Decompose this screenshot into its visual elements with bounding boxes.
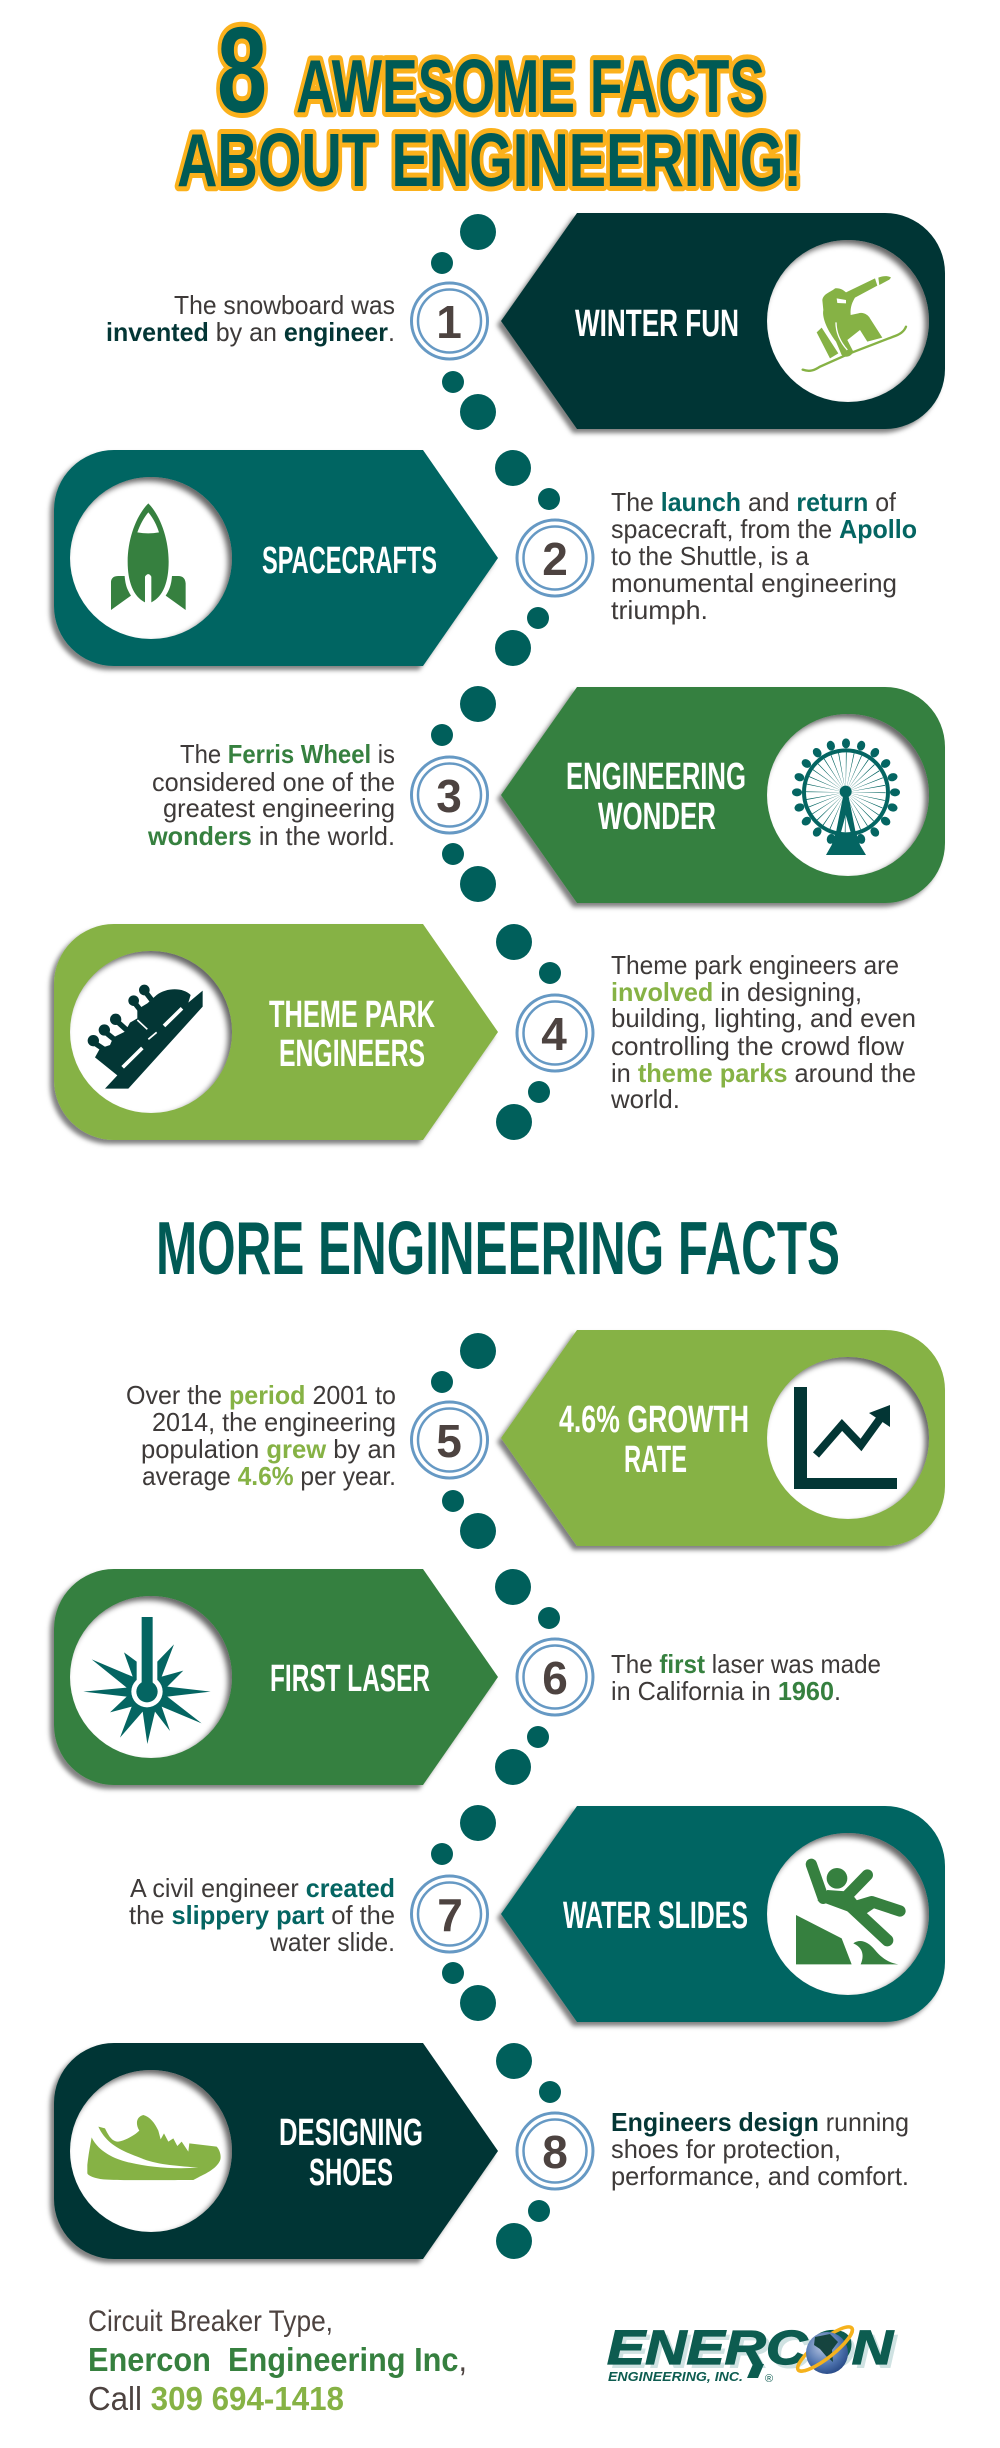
banner label: THEME PARK	[269, 994, 435, 1036]
fact text: The launch and return of	[611, 487, 897, 517]
banner shape	[501, 1806, 945, 2022]
number badge: 6	[542, 1652, 568, 1704]
banner label: SPACECRAFTS	[262, 540, 437, 582]
icon: growth chart	[794, 1387, 897, 1489]
fact text	[610, 950, 916, 1114]
banner label: RATE	[624, 1439, 687, 1481]
panel: fact 7 water slides	[129, 1805, 945, 2022]
fact text: triumph.	[611, 595, 708, 625]
number badge: 4	[541, 1008, 567, 1060]
fact text	[147, 739, 395, 851]
fact text: 2014, the engineering	[152, 1407, 396, 1437]
banner shape	[54, 924, 498, 1140]
fact text	[611, 1649, 881, 1706]
footer contact text: Enercon Engineering Inc,	[88, 2341, 467, 2378]
number badge	[517, 1639, 593, 1715]
connector dots	[431, 214, 496, 430]
panel: fact 8 designing shoes	[54, 2043, 909, 2259]
banner label	[566, 756, 746, 838]
banner label	[269, 994, 435, 1075]
connector dots	[495, 1569, 560, 1785]
number badge: 3	[436, 770, 462, 822]
banner label: ENGINEERING	[566, 756, 746, 798]
icon: running shoe	[87, 2115, 221, 2180]
panel: fact 3 engineering wonder	[147, 686, 945, 903]
fact text: invented by an engineer.	[106, 317, 395, 347]
logo: Enercon Engineering: ENGINEERING, INC.	[608, 2369, 743, 2384]
icon: rocket	[111, 503, 186, 610]
icon circle	[70, 1596, 232, 1758]
fact text: The snowboard was	[174, 290, 395, 320]
logo: Enercon Engineering: ENERCON	[607, 2322, 895, 2375]
banner label: WINTER FUN	[575, 303, 739, 345]
fact text: Theme park engineers are	[611, 950, 899, 980]
connector dots	[431, 686, 496, 902]
banner label	[279, 2112, 423, 2194]
banner shape	[501, 1330, 945, 1546]
number badge: 1	[436, 296, 462, 348]
icon: snowboarder	[803, 276, 906, 371]
fact text: performance, and comfort.	[611, 2161, 909, 2191]
banner shape	[54, 450, 498, 666]
icon: roller coaster	[88, 985, 203, 1089]
icon circle	[767, 1833, 929, 1995]
fact text: in theme parks around the	[611, 1058, 916, 1088]
fact text: Over the period 2001 to	[126, 1380, 396, 1410]
fact text: involved in designing,	[611, 977, 862, 1007]
fact text: controlling the crowd flow	[611, 1031, 904, 1061]
icon: laser burst	[83, 1617, 211, 1744]
number badge: 2	[542, 533, 568, 585]
number badge	[412, 1876, 488, 1952]
fact text	[126, 1380, 396, 1491]
fact text	[129, 1873, 395, 1957]
fact text: in California in 1960.	[611, 1676, 841, 1706]
banner label: 4.6% GROWTH	[559, 1399, 749, 1441]
logo: Enercon Engineering: ENERCON	[611, 2326, 899, 2379]
connector dots	[495, 450, 560, 666]
fact text: to the Shuttle, is a	[611, 541, 810, 571]
icon circle	[70, 951, 232, 1113]
fact text: wonders in the world.	[147, 821, 395, 851]
number badge: 5	[436, 1415, 462, 1467]
banner label: WONDER	[598, 796, 716, 838]
logo: Enercon Engineering: ®	[765, 2373, 773, 2385]
banner label: DESIGNING	[279, 2112, 423, 2154]
icon circle	[70, 477, 232, 639]
icon circle	[767, 1357, 929, 1519]
icon: person sliding	[796, 1864, 900, 1964]
title: 8	[217, 2, 267, 138]
number badge	[517, 520, 593, 596]
fact text: The first laser was made	[611, 1649, 881, 1679]
banner label: FIRST LASER	[270, 1658, 430, 1700]
title: AWESOME FACTS	[296, 44, 765, 128]
fact text: Engineers design running	[611, 2107, 909, 2137]
icon circle	[767, 714, 929, 876]
fact text: The Ferris Wheel is	[180, 739, 395, 769]
fact text: population grew by an	[141, 1434, 396, 1464]
icon circle	[767, 240, 929, 402]
icon circle	[70, 2070, 232, 2232]
number badge: 8	[542, 2126, 568, 2178]
fact text: average 4.6% per year.	[142, 1461, 396, 1491]
fact text: building, lighting, and even	[611, 1003, 916, 1033]
banner shape	[54, 2043, 498, 2259]
fact text	[106, 290, 395, 347]
panel: fact 1 winter fun	[106, 213, 945, 430]
panel: fact 4 theme park engineers	[54, 924, 916, 1140]
fact text: the slippery part of the	[129, 1900, 395, 1930]
number badge	[412, 283, 488, 359]
connector dots	[431, 1333, 496, 1549]
number badge	[517, 2113, 593, 2189]
number badge	[412, 1402, 488, 1478]
number badge	[412, 757, 488, 833]
logo: Enercon Engineering	[607, 2321, 899, 2385]
panel: fact 6 first laser	[54, 1569, 881, 1785]
fact text: spacecraft, from the Apollo	[611, 514, 917, 544]
banner label	[559, 1399, 749, 1481]
fact text	[611, 2107, 909, 2191]
fact text: shoes for protection,	[611, 2134, 841, 2164]
banner shape	[501, 687, 945, 903]
panel: fact 2 spacecrafts	[54, 450, 917, 666]
fact text: monumental engineering	[611, 568, 897, 598]
banner label: ENGINEERS	[279, 1033, 425, 1075]
fact text: greatest engineering	[163, 793, 395, 823]
title: ABOUT ENGINEERING!	[177, 118, 802, 202]
title	[177, 2, 802, 202]
fact text	[611, 487, 917, 625]
connector dots	[496, 2043, 561, 2259]
footer contact text: Circuit Breaker Type,	[88, 2305, 333, 2338]
banner label: WATER SLIDES	[563, 1895, 748, 1937]
panel: fact 5 growth rate	[126, 1330, 945, 1549]
fact text: world.	[610, 1084, 680, 1114]
banner label: SHOES	[309, 2152, 393, 2194]
footer contact text: Call 309 694-1418	[88, 2380, 344, 2417]
icon: ferris wheel	[792, 738, 900, 855]
connector dots	[496, 924, 561, 1140]
fact text: water slide.	[269, 1927, 395, 1957]
banner shape	[54, 1569, 498, 1785]
number badge: 7	[437, 1889, 463, 1941]
footer contact text	[88, 2305, 467, 2417]
fact text: considered one of the	[152, 767, 395, 797]
banner shape	[501, 213, 945, 429]
number badge	[517, 995, 593, 1071]
connector dots	[431, 1805, 496, 2021]
fact text: A civil engineer created	[130, 1873, 395, 1903]
